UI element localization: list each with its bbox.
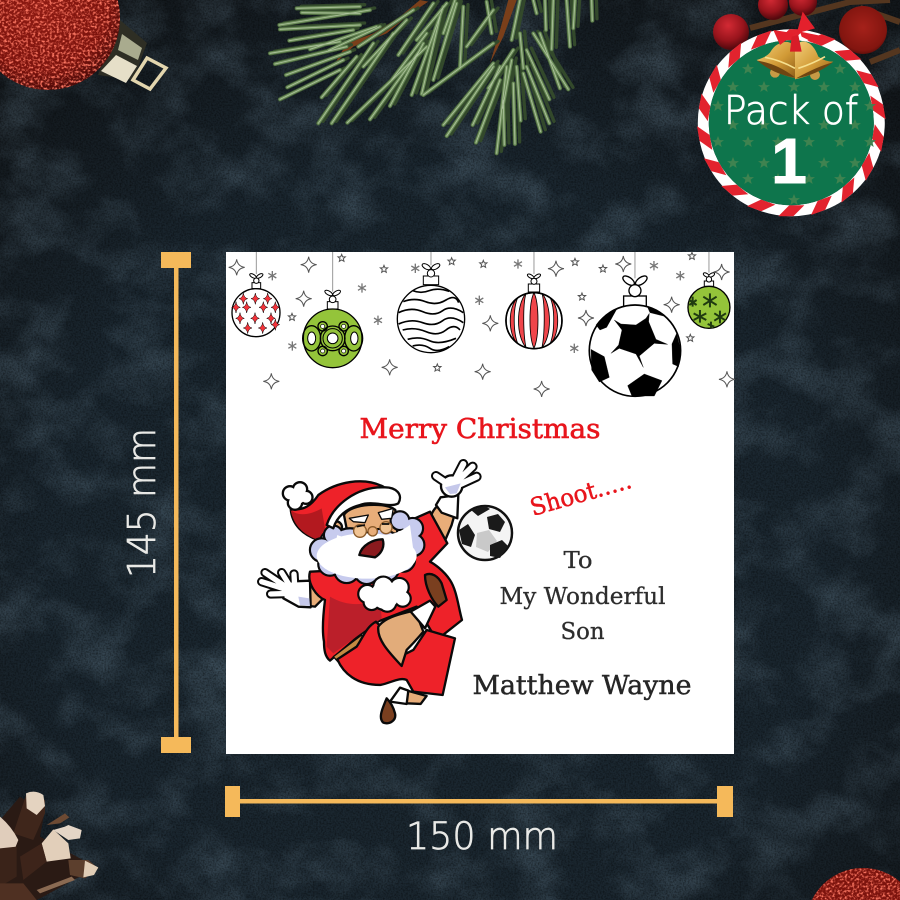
text: recipient name: Matthew Wayne bbox=[472, 671, 692, 701]
illustration: soccer ball in flight bbox=[458, 506, 512, 560]
santa: raised boot bbox=[425, 574, 447, 607]
decoration: red glitter bauble bottom right bbox=[812, 868, 900, 900]
santa: red shirt bbox=[309, 512, 462, 661]
santa: left arm and glove bbox=[262, 573, 325, 607]
santa: white fur collar bbox=[359, 578, 410, 611]
santa: raised glove and arm bbox=[430, 464, 477, 541]
decoration: pine branch top centre bbox=[270, 0, 597, 153]
illustration: Santa kicking a ball bbox=[262, 464, 477, 723]
badge: pack of 1 bbox=[697, 12, 886, 216]
card decoration: sparkles and stars bbox=[229, 252, 735, 397]
decoration: red glitter bauble top left bbox=[0, 0, 166, 90]
santa: beard bbox=[311, 512, 423, 583]
badge ring: candy stripes bbox=[697, 29, 886, 216]
text: Shoot.....: Shoot..... bbox=[527, 466, 635, 522]
santa: hat band bbox=[327, 487, 400, 528]
dimension: card height 145 mm bbox=[120, 252, 191, 753]
dimension label: 150 mm: 150 mm bbox=[406, 815, 558, 858]
santa: raised leg bbox=[378, 610, 423, 666]
santa: raised sock bbox=[411, 601, 435, 628]
santa: mouth bbox=[359, 539, 383, 557]
bauble: red and white stripes bbox=[506, 252, 562, 349]
bauble: soccer ball bbox=[589, 252, 681, 396]
card decoration: hanging baubles bbox=[232, 252, 730, 396]
badge star pattern bbox=[712, 63, 876, 205]
bauble: green with rings bbox=[303, 252, 363, 368]
dimension label: 145 mm: 145 mm bbox=[120, 428, 164, 578]
badge text: Pack of: Pack of bbox=[724, 89, 858, 134]
badge number: 1: 1 bbox=[771, 125, 807, 197]
santa: belt bbox=[333, 635, 363, 663]
badge disc bbox=[709, 40, 874, 205]
bauble: white with red stars bbox=[232, 252, 280, 337]
decoration: berries and twigs top right bbox=[713, 0, 900, 62]
bauble: green with snowflakes bbox=[688, 252, 730, 328]
santa: glasses and brows bbox=[349, 508, 393, 537]
text: To: To bbox=[564, 548, 592, 574]
santa: lower leg and boot bbox=[381, 688, 427, 723]
decoration: pine cone bottom left bbox=[0, 792, 98, 900]
icon: golden bells with red bow bbox=[757, 12, 833, 80]
dimension: card width 150 mm bbox=[225, 786, 733, 858]
santa: hat bbox=[284, 481, 390, 540]
text: Son: Son bbox=[560, 619, 605, 645]
bauble: white with wavy lines bbox=[397, 252, 465, 353]
santa: shirt shadow bbox=[327, 597, 382, 653]
heading: Merry Christmas: Merry Christmas bbox=[360, 414, 600, 445]
text: My Wonderful: My Wonderful bbox=[500, 584, 666, 610]
card panel bbox=[226, 252, 735, 754]
santa: red shorts bbox=[337, 622, 455, 695]
santa: face bbox=[330, 505, 397, 537]
